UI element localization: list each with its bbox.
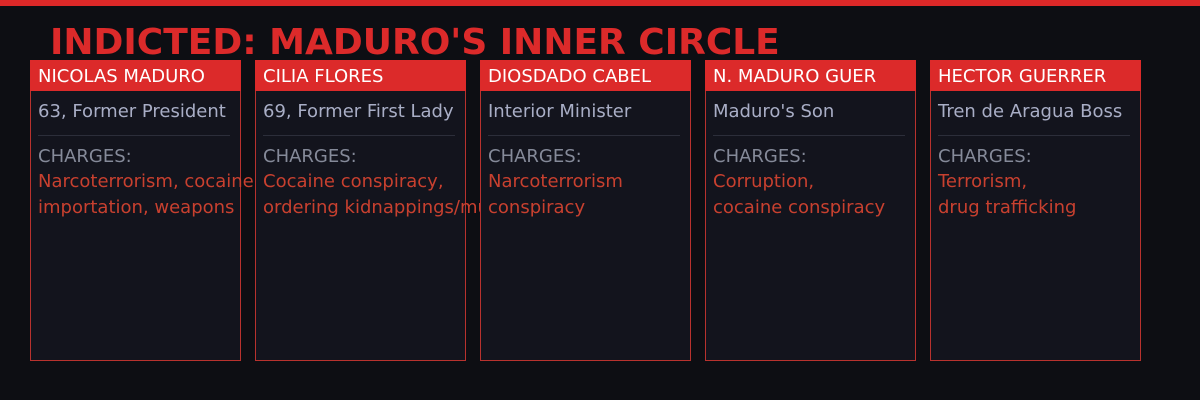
panel: Cilia Flores: CHARGES: — [263, 146, 357, 167]
panel: Nicolas Maduro: Narcoterrorism, cocaine — [38, 171, 254, 192]
panel: N. Maduro Guerra: cocaine conspiracy — [713, 197, 885, 218]
panel: Cilia Flores: CILIA FLORES — [263, 66, 383, 87]
title: INDICTED: MADURO'S INNER CIRCLE — [50, 22, 780, 63]
panel: Hector Guerrero: HECTOR GUERRER — [938, 66, 1106, 87]
top accent bar — [0, 0, 1200, 6]
panel: Cilia Flores: Cocaine conspiracy, — [263, 171, 444, 192]
panel: Nicolas Maduro: importation, weapons — [38, 197, 234, 218]
panel: Hector Guerrero: CHARGES: — [938, 146, 1032, 167]
panel: N. Maduro Guerra: Maduro's Son — [713, 101, 834, 122]
panel: Hector Guerrero — [930, 60, 1141, 360]
panel: Cilia Flores — [255, 60, 489, 360]
panel: Nicolas Maduro: 63, Former President — [38, 101, 226, 122]
panel: Cilia Flores: ordering kidnappings/mu — [263, 197, 489, 218]
panel: Diosdado Cabello: conspiracy — [488, 197, 585, 218]
panel: Hector Guerrero: drug trafficking — [938, 197, 1076, 218]
panel: Nicolas Maduro — [30, 60, 254, 360]
panel: Diosdado Cabello: CHARGES: — [488, 146, 582, 167]
panel: Diosdado Cabello: DIOSDADO CABEL — [488, 66, 651, 87]
panel: Hector Guerrero: Tren de Aragua Boss — [937, 101, 1122, 122]
panel: Diosdado Cabello: Interior Minister — [488, 101, 632, 122]
panel: Diosdado Cabello — [480, 60, 691, 360]
panel: Nicolas Maduro: NICOLAS MADURO — [38, 66, 205, 87]
panel: N. Maduro Guerra: Corruption, — [713, 171, 814, 192]
panel: Hector Guerrero: Terrorism, — [937, 171, 1027, 192]
panel: Nicolas Maduro: CHARGES: — [38, 146, 132, 167]
panel: Cilia Flores: 69, Former First Lady — [263, 101, 454, 122]
panel: N. Maduro Guerra: N. MADURO GUER — [713, 66, 876, 87]
panel: N. Maduro Guerra — [705, 60, 916, 360]
panel: N. Maduro Guerra: CHARGES: — [713, 146, 807, 167]
panel: Diosdado Cabello: Narcoterrorism — [488, 171, 623, 192]
